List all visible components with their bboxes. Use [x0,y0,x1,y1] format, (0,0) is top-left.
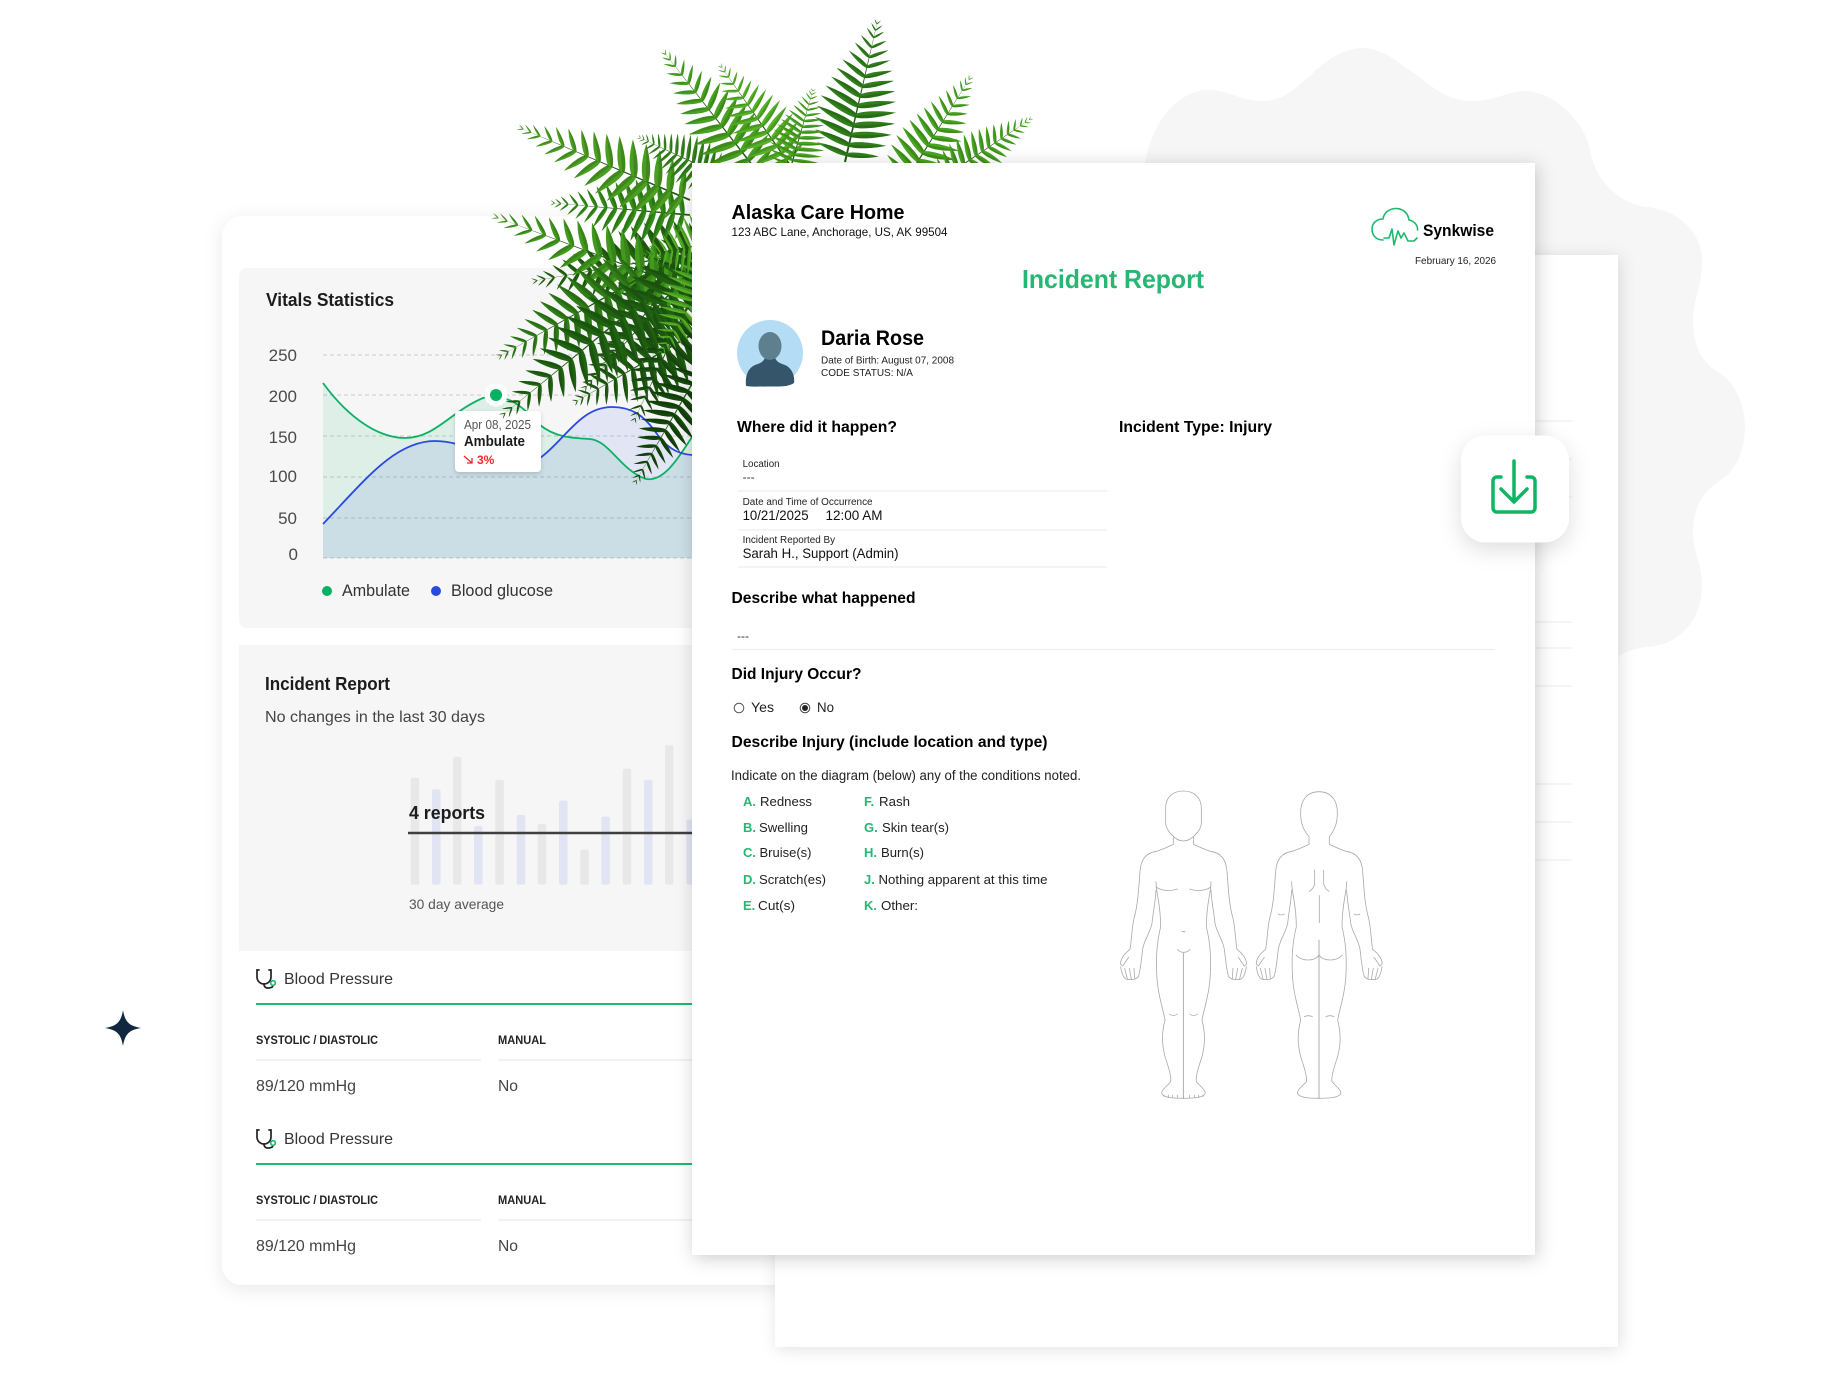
chart axis labels: 100 [269,467,297,486]
icon: cloud logo [1372,208,1418,245]
background blob [1144,48,1745,657]
icon: four-point star [105,1010,141,1046]
list: condition codes column 1: Bruise(s) [760,845,812,860]
icon: stethoscope [257,1130,275,1148]
table: incident location details: --- [743,470,755,484]
section: blood pressure 1 [256,970,700,1095]
list: condition codes column 2: Other: [881,898,918,913]
text: facility address: 123 ABC Lane, Anchorage, US, AK 99504 [732,225,948,239]
list: condition codes column 1: Scratch(es) [759,872,826,887]
heading: vitals statistics: Vitals Statistics [266,290,394,310]
list: condition codes column 1: Redness [760,794,813,809]
icon: patient avatar [737,320,803,387]
section: blood pressure 2: MANUAL [498,1195,546,1207]
heading: where did it happen: Where did it happen? [737,419,897,436]
text: blood pressure: Blood Pressure [284,1131,393,1148]
icon: download arrow [1493,461,1535,512]
chart marker [484,384,508,406]
chart axis labels: 250 [269,346,297,365]
table: incident location details: Sarah H., Support (Admin) [743,545,899,561]
chart axis labels: 50 [278,509,297,528]
list: condition codes column 2: H. [864,845,877,860]
radio options: No [817,700,834,715]
list: condition codes column 2: K. [864,898,877,913]
list: condition codes column 2: J. [864,872,875,887]
list: condition codes column 1: B. [743,820,756,835]
text: blood pressure: Blood Pressure [284,971,393,988]
text: 4 reports: 4 reports [409,802,485,823]
diagram: body front and back [1121,791,1382,1098]
list: condition codes column 1: Cut(s) [758,898,795,913]
chart axis labels: 200 [269,387,297,406]
text: diagram instruction: Indicate on the diagram (below) any of the conditions noted. [731,768,1081,783]
table: incident location details: Location [743,459,780,470]
section: blood pressure 2: No [498,1238,518,1255]
title: incident report: Incident Report [1022,264,1204,294]
heading: describe what happened: Describe what happened [732,590,916,607]
text: patient details: Date of Birth: August 07, 2008 [821,354,954,366]
table: incident location details: Incident Reported By [743,535,835,546]
chart tooltip [455,411,541,472]
chart axis labels [269,346,298,564]
section: blood pressure 2 [256,1130,700,1255]
text: empty description: --- [737,629,749,643]
body front view [1121,791,1246,1098]
heading: incident type: Incident Type: Injury [1119,419,1272,436]
section: blood pressure 2: 89/120 mmHg [256,1238,356,1255]
text: 30 day average: 30 day average [409,896,504,912]
radio options [734,700,834,715]
chart tooltip: Ambulate [464,434,525,450]
chart tooltip: 3% [477,453,495,467]
table: incident location details: Date and Time of Occurrence [743,497,873,508]
chart legend: Blood glucose [451,582,553,600]
body back view [1256,792,1382,1098]
list: condition codes column 2: F. [864,794,874,809]
panel: back document page [775,255,1618,1347]
chart legend [322,582,553,600]
text: facility name: Alaska Care Home [732,202,904,224]
list: condition codes column 2: G. [864,820,878,835]
chart legend: Ambulate [342,582,410,600]
panel: incident report summary [239,645,759,951]
section: blood pressure 1: No [498,1078,518,1095]
list: condition codes column 1: Swelling [759,820,808,835]
chart tooltip: Apr 08, 2025 [464,418,531,432]
section: blood pressure 1: SYSTOLIC / DIASTOLIC [256,1035,378,1047]
text: patient name: Daria Rose [821,327,924,350]
radio options: Yes [751,700,774,715]
list: condition codes column 1: C. [743,845,756,860]
heading: incident report: Incident Report [265,674,390,694]
list: condition codes column 2: Burn(s) [881,845,924,860]
panel: incident report document [692,163,1535,1255]
section: blood pressure 1: 89/120 mmHg [256,1078,356,1095]
chart: vitals area chart [323,355,692,558]
section: blood pressure 2: SYSTOLIC / DIASTOLIC [256,1195,378,1207]
list: condition codes column 2 [864,794,1048,913]
text: no changes: No changes in the last 30 days [265,709,485,726]
panel: vitals statistics [239,268,692,628]
table: incident location details [738,459,1107,567]
icon: stethoscope [257,970,275,988]
list: condition codes column 1: A. [743,794,756,809]
text: brand name: Synkwise [1423,222,1494,240]
text: report date: February 16, 2026 [1415,255,1496,267]
section: blood pressure 1: MANUAL [498,1035,546,1047]
chart axis labels: 0 [289,545,298,564]
text: patient details [821,354,954,379]
heading: did injury occur: Did Injury Occur? [732,666,862,683]
table: incident location details: 12:00 AM [826,507,882,523]
list: condition codes column 1: D. [743,872,756,887]
list: condition codes column 2: Nothing apparent at this time [878,872,1048,887]
text: patient details: CODE STATUS: N/A [821,367,913,379]
list: condition codes column 1: E. [743,898,755,913]
image: fern plant [472,7,1049,503]
list: condition codes column 1 [743,794,826,913]
list: condition codes column 2: Skin tear(s) [882,820,949,835]
panel: patient dashboard card [222,216,822,1285]
table: incident location details: 10/21/2025 [743,507,809,523]
chart axis labels: 150 [269,428,297,447]
list: condition codes column 2: Rash [879,794,910,809]
heading: describe injury: Describe Injury (include location and type) [732,734,1048,751]
bar chart: reports [411,745,695,885]
button: download [1461,436,1569,542]
